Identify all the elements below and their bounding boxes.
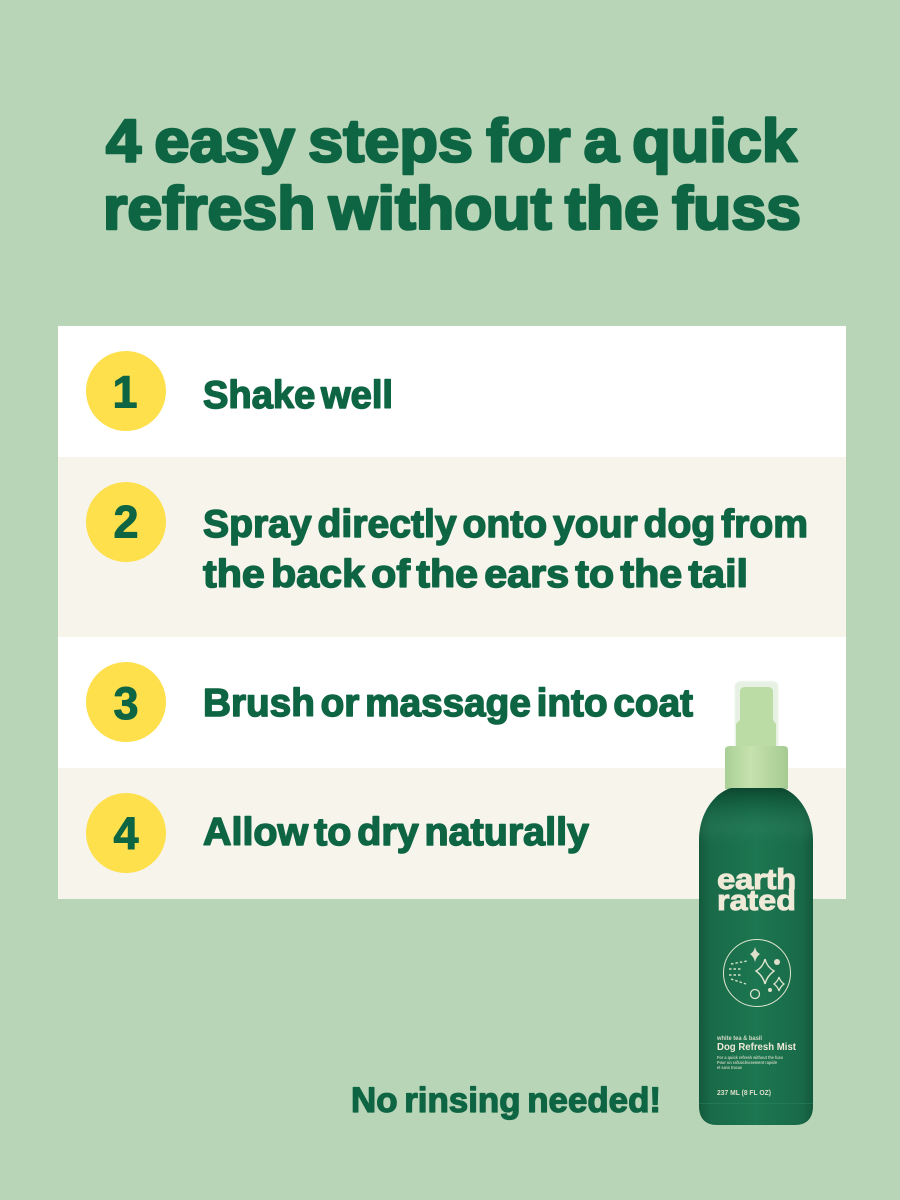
bottle body xyxy=(699,788,813,1125)
bottle label text xyxy=(716,1035,797,1097)
bottle label text: 237 ML (8 FL OZ) xyxy=(717,1088,771,1097)
step 4 row: 4 xyxy=(113,808,139,859)
title: 4 easy steps for a quick xyxy=(106,108,798,174)
step 1 row: Shake well xyxy=(203,374,393,417)
title xyxy=(103,108,801,242)
bottle collar xyxy=(725,746,788,789)
step 2 row: 2 xyxy=(113,496,139,548)
step 2 row xyxy=(58,457,846,637)
bottle label text: white tea & basil xyxy=(716,1035,762,1042)
bottle label text: et sans tracas xyxy=(717,1065,742,1070)
step 3 row xyxy=(58,637,846,768)
panel: steps list xyxy=(58,326,846,899)
bottle shoulder shading xyxy=(699,788,813,848)
callout: no rinsing needed: No rinsing needed! xyxy=(351,1081,661,1120)
bottle logo: rated xyxy=(717,885,796,917)
step 2 row: the back of the ears to the tail xyxy=(203,553,748,596)
bottle label text: Dog Refresh Mist xyxy=(717,1042,797,1053)
step 1 row: 1 xyxy=(112,366,138,418)
bottle label text: Pour un rafraichissement rapide xyxy=(717,1060,777,1065)
bottle base seam xyxy=(699,1103,813,1104)
step 1 row xyxy=(58,326,846,457)
title: refresh without the fuss xyxy=(103,175,801,242)
bottle clear cap xyxy=(735,682,778,752)
step 3 row: Brush or massage into coat xyxy=(203,682,693,725)
product: spray bottle xyxy=(699,682,813,1125)
bottle logo: earth xyxy=(717,864,796,896)
step 4 row: Allow to dry naturally xyxy=(203,811,589,854)
bottle logo xyxy=(717,864,796,917)
step 4 row xyxy=(58,768,846,899)
icon: spray and sparkles xyxy=(724,940,790,1006)
step 2 row: Spray directly onto your dog from xyxy=(203,503,808,546)
bottle label text: For a quick refresh without the fuss xyxy=(717,1055,783,1060)
step 3 row: 3 xyxy=(113,678,139,729)
